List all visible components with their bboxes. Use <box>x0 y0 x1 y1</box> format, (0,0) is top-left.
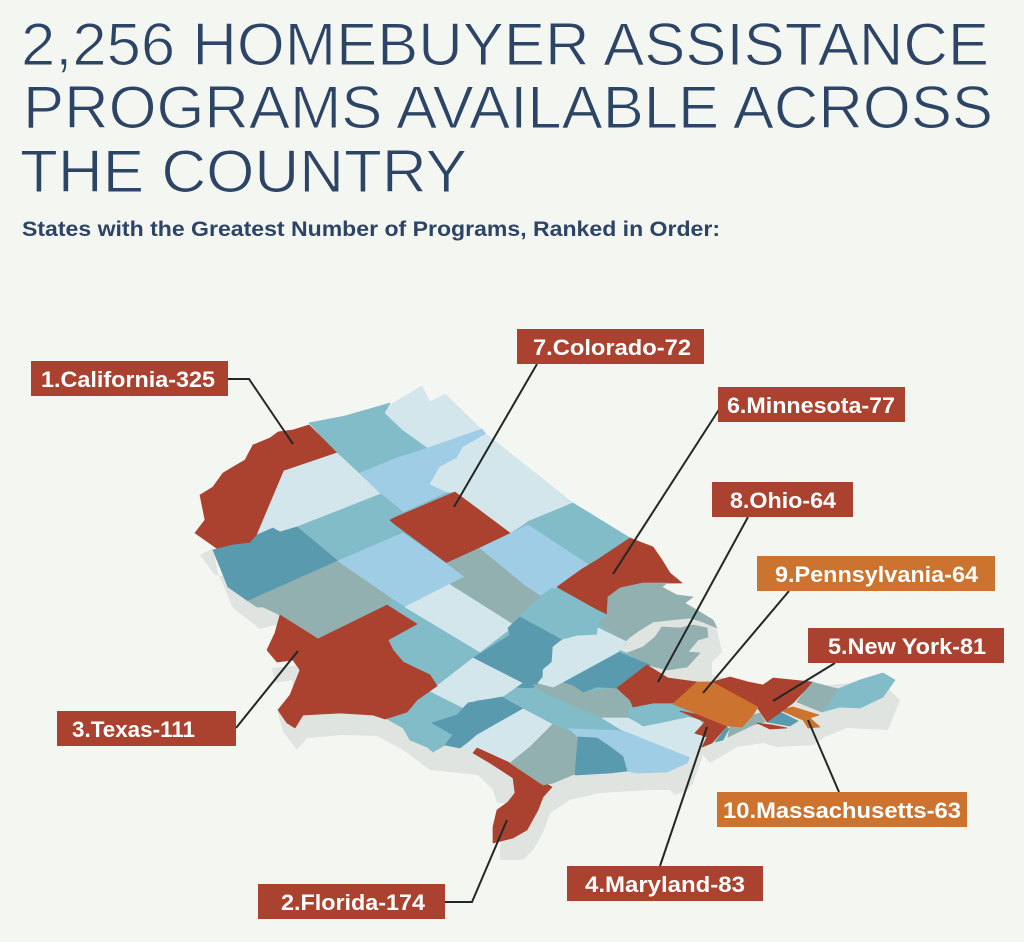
state: Idaho <box>385 386 482 448</box>
state: New York <box>712 677 812 722</box>
connector: Texas <box>236 651 298 728</box>
state: Louisiana <box>387 692 462 752</box>
state: Wisconsin <box>598 583 717 642</box>
state: Indiana <box>563 652 650 692</box>
state: Missouri north <box>518 588 607 640</box>
state: Mississippi <box>432 697 523 748</box>
label: Ohio <box>712 482 853 517</box>
state: South Dakota <box>527 503 630 567</box>
connector: Maryland <box>660 727 707 866</box>
label: Colorado: 7.Colorado-72 <box>533 335 691 360</box>
state: Maine <box>822 673 895 712</box>
subtitle: States with the Greatest Number of Programs, Ranked in Order: <box>22 218 720 241</box>
state: Tennessee <box>503 688 622 730</box>
label: Minnesota: 6.Minnesota-77 <box>727 393 895 418</box>
label: California: 1.California-325 <box>41 367 215 392</box>
state: Kentucky <box>533 683 630 718</box>
label: Texas <box>57 711 236 746</box>
state: Utah <box>338 533 465 607</box>
label: California <box>31 361 228 396</box>
state: Oklahoma strip <box>387 600 480 683</box>
state: West Virginia <box>628 704 687 726</box>
label: New York: 5.New York-81 <box>828 634 986 659</box>
title: 2,256 HOMEBUYER ASSISTANCE <box>21 11 989 78</box>
label: Florida <box>258 884 445 919</box>
map of the United States <box>195 386 900 860</box>
state: Delaware <box>715 727 729 742</box>
state: New York, Long Island <box>757 723 787 729</box>
label: Ohio: 8.Ohio-64 <box>730 488 837 513</box>
label: Pennsylvania: 9.Pennsylvania-64 <box>775 562 979 587</box>
state: South Carolina <box>575 737 627 775</box>
label: Pennsylvania <box>757 556 995 591</box>
state: Montana <box>360 429 486 512</box>
state: California <box>195 425 337 552</box>
label: Massachusetts <box>717 792 967 827</box>
state: Virginia <box>602 717 705 757</box>
state: Alabama <box>462 709 553 763</box>
state: Washington <box>309 403 428 473</box>
state: Arkansas <box>430 658 522 708</box>
map shadow <box>200 548 900 860</box>
state: North Carolina <box>568 728 690 773</box>
label: Maryland <box>567 866 763 901</box>
state: Michigan <box>627 625 708 670</box>
state: New Mexico <box>248 561 393 639</box>
state: Wyoming <box>297 494 403 561</box>
state: Connecticut <box>767 712 798 726</box>
connector: Ohio <box>658 517 748 682</box>
title <box>20 11 993 205</box>
connector: Massachusetts <box>808 720 839 792</box>
state: Pennsylvania <box>673 682 758 727</box>
label: Massachusetts: 10.Massachusetts-63 <box>723 798 961 823</box>
state: Florida <box>473 748 552 843</box>
label: New York <box>808 628 1004 663</box>
connector: Colorado <box>454 364 537 507</box>
state: Missouri <box>473 617 562 688</box>
state: Illinois <box>538 628 627 687</box>
state: Ohio <box>617 665 697 707</box>
state: Texas <box>267 605 437 728</box>
label: Texas: 3.Texas-111 <box>72 717 195 742</box>
connector: Minnesota <box>613 408 720 574</box>
connector: California <box>228 379 293 444</box>
state: Vermont and New Hampshire <box>797 682 838 712</box>
state: lakes shadow <box>620 612 722 690</box>
state: Iowa north <box>480 525 592 595</box>
connector: Florida <box>445 820 507 902</box>
map base <box>222 415 745 770</box>
state: Dakotas <box>430 434 573 533</box>
label: Minnesota <box>718 387 905 422</box>
state: Nebraska <box>447 548 540 625</box>
title: PROGRAMS AVAILABLE ACROSS <box>23 74 993 141</box>
state: Minnesota <box>557 538 682 615</box>
connector: New York <box>773 663 835 701</box>
title: THE COUNTRY <box>20 138 467 205</box>
state: Maryland <box>680 711 727 747</box>
state: Kansas <box>405 584 515 652</box>
connector: Pennsylvania <box>703 591 789 693</box>
label: Florida: 2.Florida-174 <box>281 890 426 915</box>
state: New Jersey <box>728 713 765 737</box>
state: Arizona <box>213 527 338 601</box>
label: Maryland: 4.Maryland-83 <box>585 872 745 897</box>
state: Massachusetts <box>780 707 820 728</box>
state: Colorado <box>389 492 510 563</box>
label: Colorado <box>517 329 704 364</box>
state: Nevada <box>257 453 381 535</box>
state: Georgia <box>510 724 580 785</box>
